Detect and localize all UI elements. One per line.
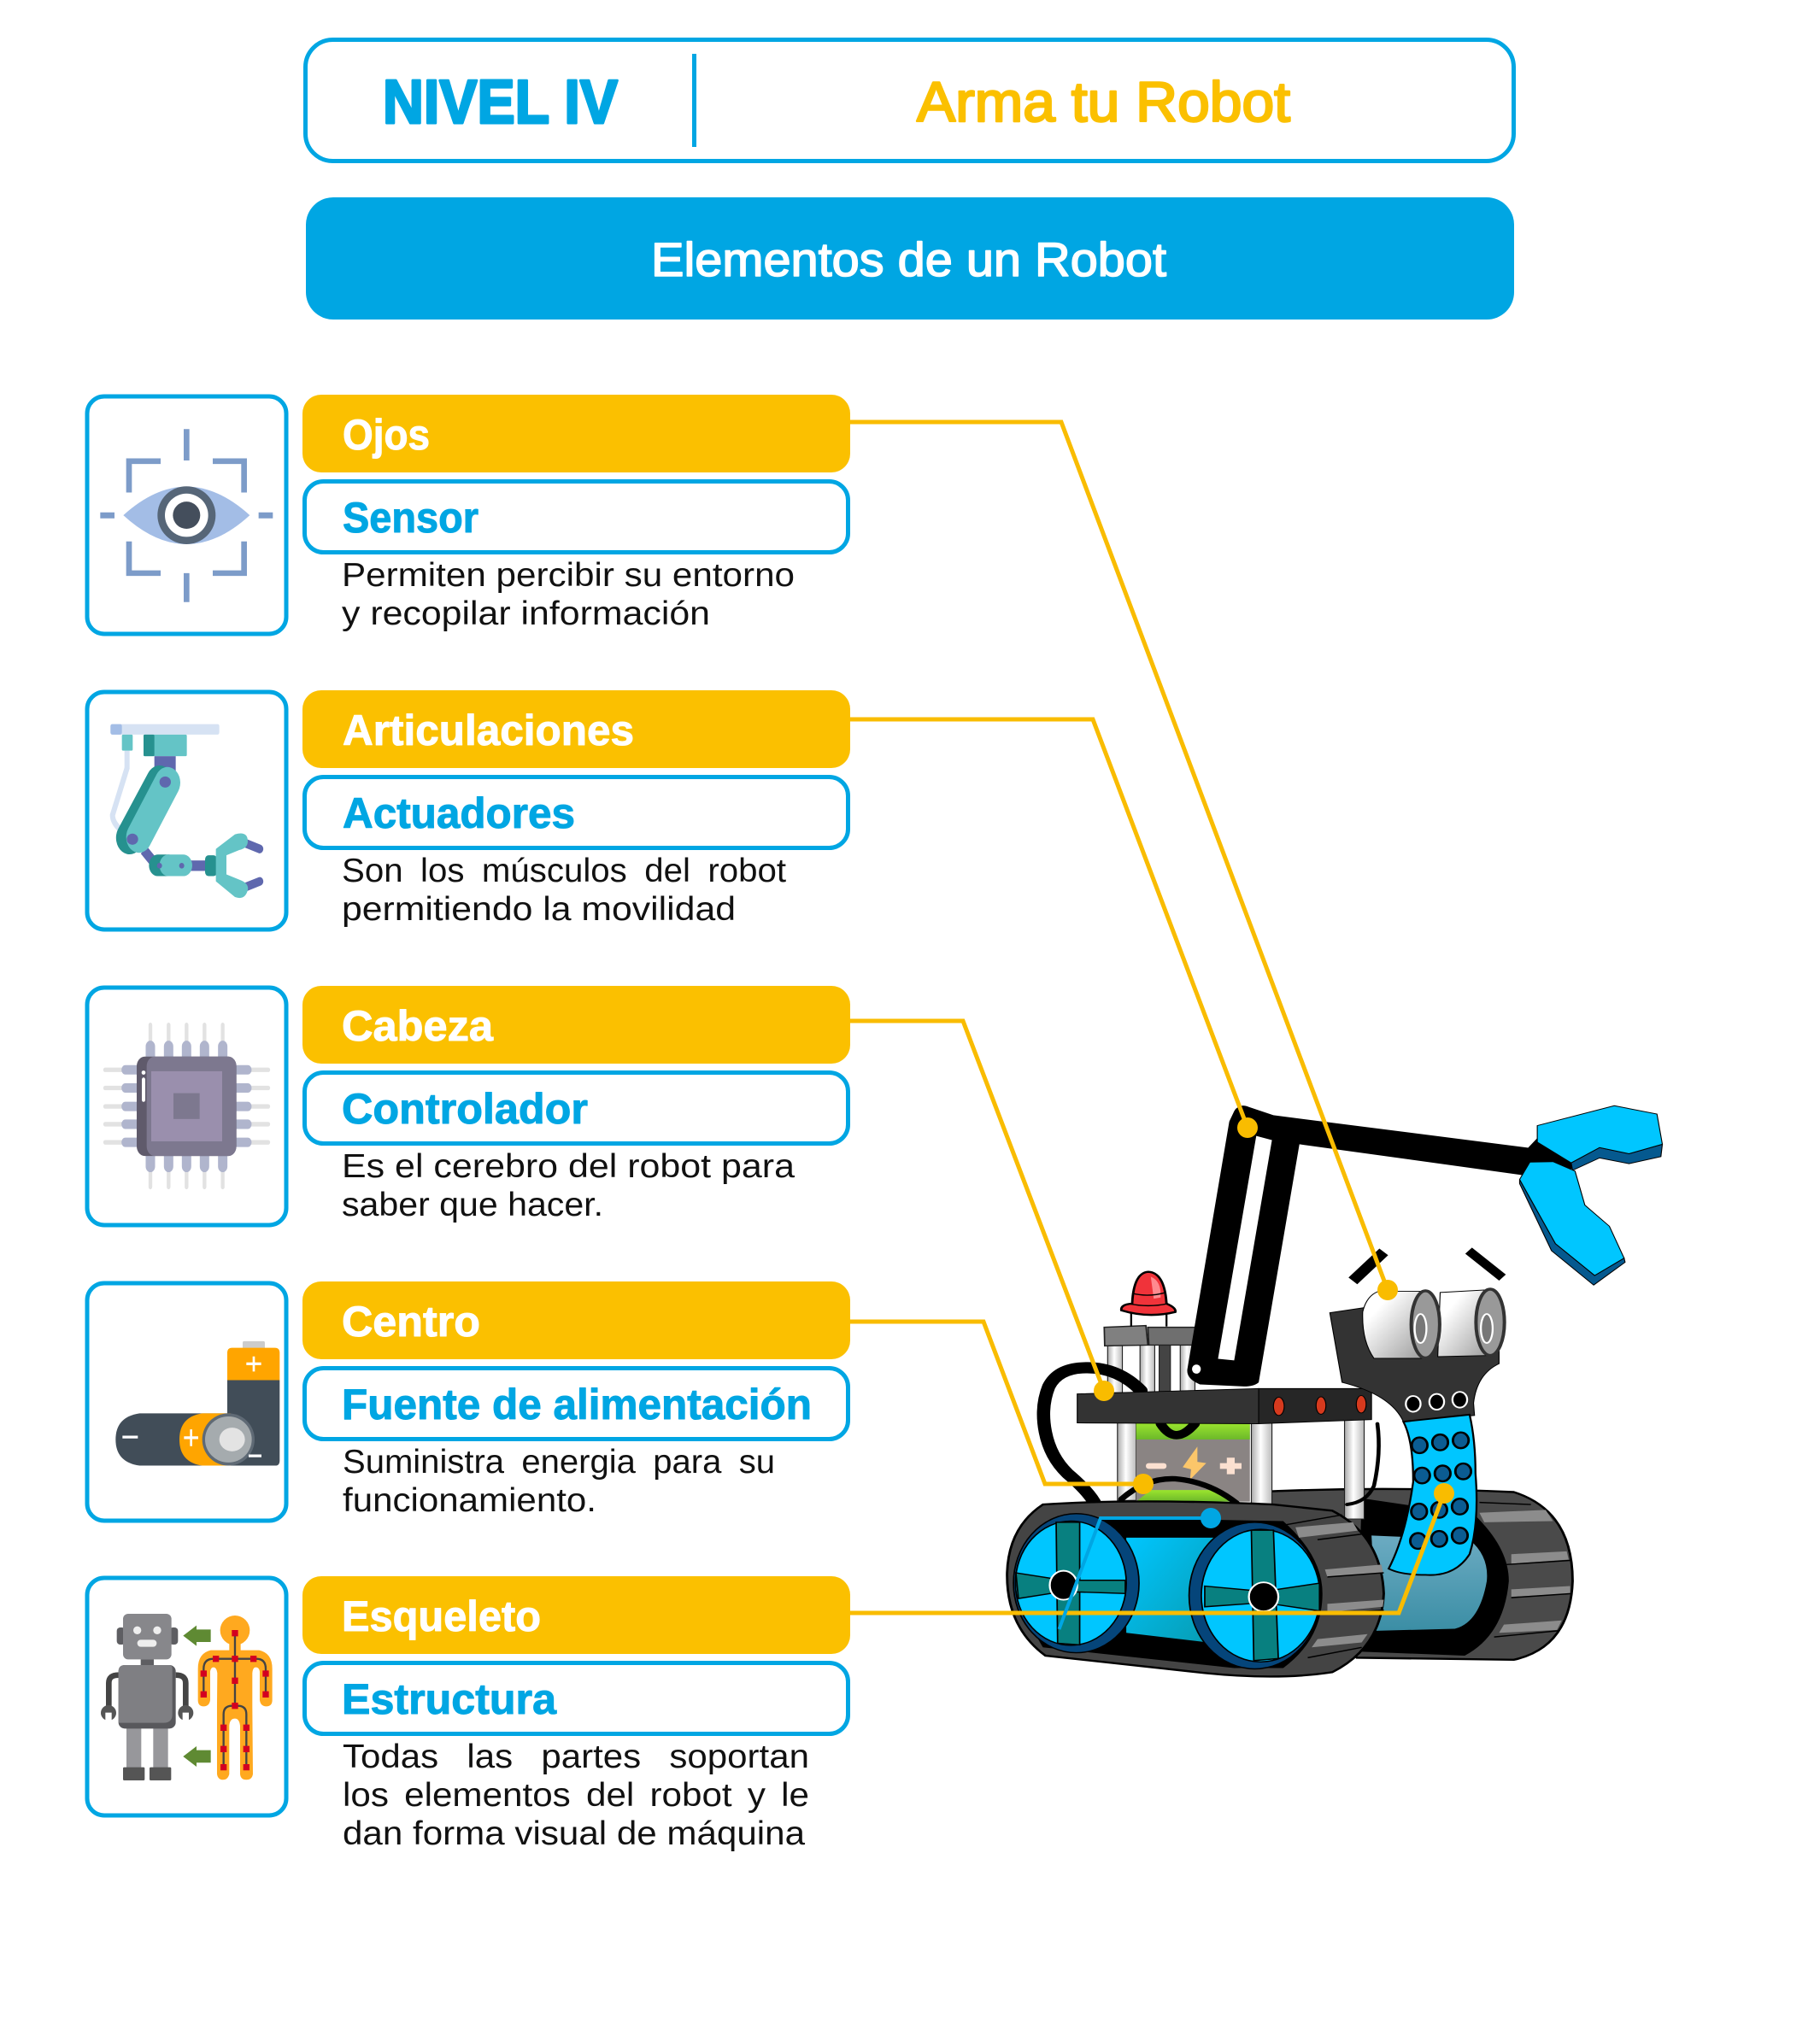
icon: microchip [87,988,286,1225]
label box: Controlador [304,1073,848,1143]
banner: Elementos de un Robot [306,197,1514,320]
ultrasonic sensor eyes [1363,1289,1505,1358]
description: Estructura [343,1739,809,1852]
heading: Arma tu Robot: Arma tu Robot [917,70,1290,133]
blue body panel [1388,1415,1477,1575]
row: Cabeza / Controlador [87,986,850,1225]
description: Actuadores: permitiendo la movilidad [342,891,736,928]
heading: NIVEL IV: NIVEL IV [383,68,618,137]
description: Fuente de alimentación: Suministra energia para su [343,1444,775,1481]
label bar: Centro: Centro [342,1298,480,1346]
label bar: Centro [302,1281,850,1359]
label bar: Ojos [302,395,850,472]
description: Actuadores [342,853,786,928]
description: Fuente de alimentación: funcionamiento. [343,1482,596,1519]
banner: Elementos de un Robot: Elementos de un Robot [651,232,1166,286]
label bar: Ojos: Ojos [343,411,430,459]
icon: batteries [87,1283,286,1521]
label bar: Cabeza: Cabeza [342,1002,494,1050]
label box: Fuente de alimentación [304,1369,848,1439]
support posts [1107,1345,1365,1519]
row: Centro / Fuente de alimentación [87,1281,850,1521]
connector: Esqueleto to body [850,1483,1454,1613]
top plates [1104,1326,1197,1346]
label box: Sensor: Sensor [343,494,478,542]
label box: Estructura: Estructura [342,1675,557,1723]
cables [1043,1368,1379,1504]
description: Sensor: y recopilar información [342,595,710,632]
row: Articulaciones / Actuadores [87,690,850,929]
connector: Ojos to eye sensor [850,422,1398,1300]
description: Controlador: saber que hacer. [342,1187,603,1223]
label bar: Cabeza [302,986,850,1064]
connector: blue pointer on track [1060,1508,1221,1629]
label box: Controlador: Controlador [342,1085,588,1133]
platform [1077,1388,1371,1424]
label box: Actuadores [304,777,848,847]
description: Actuadores: Son los músculos del robot [342,853,786,889]
description: Estructura: los elementos del robot y le [343,1777,809,1814]
description: Sensor: Permiten percibir su entorno [342,557,795,594]
back track [1253,1489,1572,1660]
row: Esqueleto / Estructura [87,1576,850,1852]
description: Controlador: Es el cerebro del robot para [342,1148,795,1185]
right wheel [1189,1522,1320,1668]
label bar: Articulaciones [302,690,850,768]
arm [1187,1105,1534,1387]
connector: Cabeza to platform [850,1021,1114,1401]
label box: Fuente de alimentación: Fuente de alimentación [342,1381,812,1428]
description: Estructura: dan forma visual de máquina [343,1815,805,1852]
row: Ojos / Sensor [87,395,850,634]
eyebrows [1353,1251,1502,1281]
battery [1136,1423,1250,1502]
label bar: Esqueleto: Esqueleto [342,1592,541,1640]
claw [1519,1105,1663,1285]
connector: Articulaciones to arm [850,719,1258,1138]
icon: eye sensor [87,396,286,634]
robot illustration [1007,1105,1663,1676]
label box: Sensor [304,482,848,552]
label bar: Articulaciones: Articulaciones [343,707,634,754]
red beacon [1121,1272,1176,1327]
label bar: Esqueleto [302,1576,850,1654]
icon: robotic arm [87,692,286,929]
description: Estructura: Todas las partes soportan [343,1739,809,1775]
front track [1007,1501,1383,1676]
icon: robot and human skeleton [87,1578,286,1815]
label box: Estructura [304,1662,848,1734]
header: level and title [306,39,1514,161]
description: Fuente de alimentación [343,1444,775,1519]
connector: Centro to battery [850,1322,1154,1494]
description: Controlador [342,1148,795,1223]
left wheel [1013,1514,1139,1653]
label box: Actuadores: Actuadores [343,789,575,837]
head mount [1330,1306,1499,1422]
description: Sensor [342,557,795,632]
